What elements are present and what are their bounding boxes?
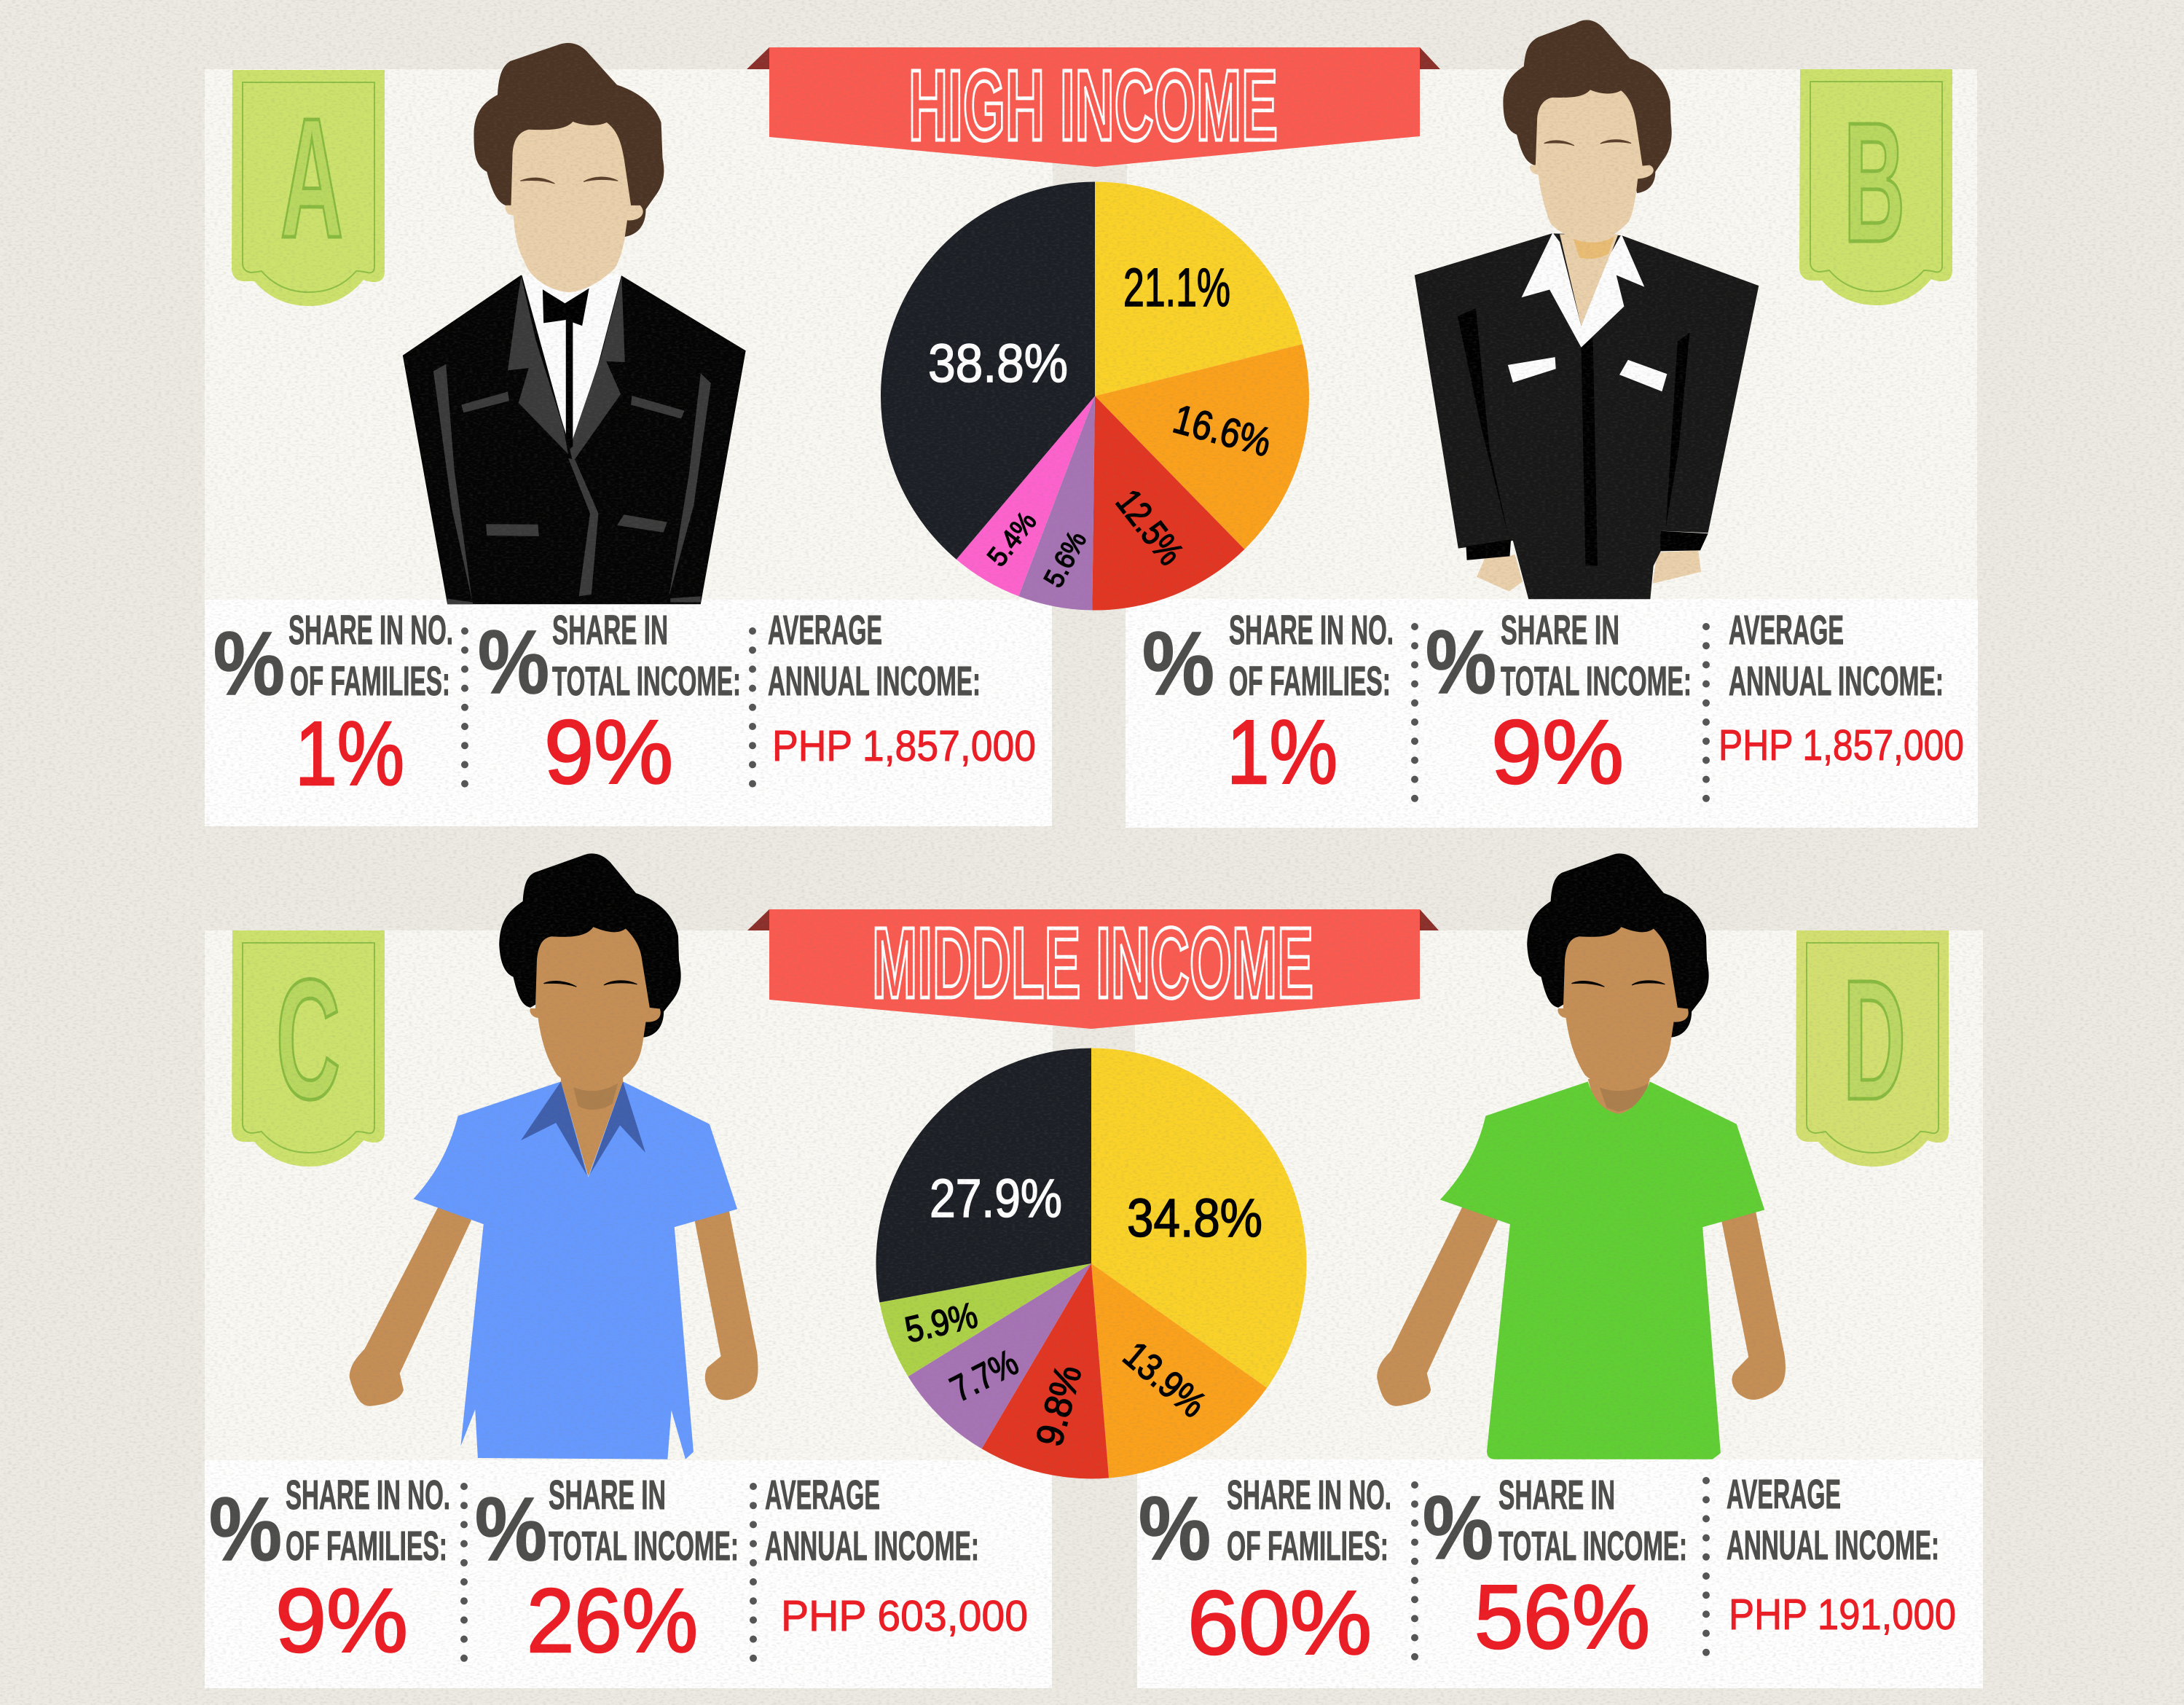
label 38.8%: 38.8% — [928, 333, 1068, 393]
badge C: C — [276, 944, 340, 1134]
average income label: AVERAGE — [1729, 607, 1844, 654]
label 5.9%: 5.9% — [901, 1294, 981, 1351]
stats block A — [213, 607, 1036, 804]
value 60%: 60% — [1187, 1573, 1372, 1674]
value average income: PHP 191,000 — [1729, 1591, 1956, 1639]
value average income: PHP 1,857,000 — [1718, 721, 1964, 769]
figure A: man in tuxedo — [403, 43, 746, 604]
stats block B — [1142, 607, 1964, 803]
average income label: ANNUAL INCOME: — [768, 658, 981, 705]
share in income label: SHARE IN — [1498, 1472, 1615, 1518]
panel: high income right — [1127, 69, 1977, 601]
share in families label: SHARE IN NO. — [1227, 1472, 1391, 1518]
badge A: A — [280, 82, 343, 273]
share in income label: SHARE IN — [552, 607, 668, 654]
share in income label: TOTAL INCOME: — [1498, 1523, 1687, 1569]
figure C: man in blue polo — [350, 853, 758, 1459]
average income label: ANNUAL INCOME: — [1727, 1522, 1939, 1569]
average income label: AVERAGE — [1727, 1471, 1841, 1518]
share in families label: OF FAMILIES: — [1229, 658, 1391, 705]
average income label: AVERAGE — [765, 1472, 880, 1518]
share in families label: SHARE IN NO. — [288, 607, 453, 654]
stats block C — [209, 1472, 1028, 1671]
info panel B background — [1126, 599, 1978, 828]
panel: high income left — [205, 69, 1053, 601]
panel: middle income right — [1135, 930, 1983, 1462]
pie chart: middle income — [876, 1048, 1306, 1478]
share in families label: SHARE IN NO. — [286, 1472, 450, 1518]
figure D: man in green t-shirt — [1377, 853, 1786, 1459]
percent icon: % — [478, 613, 549, 713]
pie chart: high income — [881, 181, 1309, 611]
value 9%: 9% — [544, 702, 673, 803]
info panel D background — [1137, 1459, 1983, 1688]
label 12.5%: 12.5% — [1108, 482, 1191, 573]
average income label: ANNUAL INCOME: — [1729, 658, 1944, 705]
heading: high income: HIGH INCOME — [908, 50, 1278, 162]
panel: middle income left — [205, 930, 1053, 1462]
badge B — [1799, 69, 1952, 305]
stats block D — [1139, 1471, 1956, 1674]
percent icon: % — [1142, 614, 1214, 714]
percent icon: % — [1426, 613, 1496, 713]
label 7.7%: 7.7% — [944, 1341, 1024, 1410]
label 16.6%: 16.6% — [1168, 395, 1276, 466]
value 56%: 56% — [1474, 1567, 1650, 1668]
share in families label: OF FAMILIES: — [290, 658, 450, 705]
percent icon: % — [1139, 1479, 1211, 1579]
value 26%: 26% — [527, 1571, 698, 1671]
share in families label: SHARE IN NO. — [1229, 607, 1394, 654]
value average income: PHP 603,000 — [781, 1592, 1028, 1640]
value average income: PHP 1,857,000 — [772, 722, 1036, 770]
figure D head — [1527, 853, 1709, 1090]
value 9%: 9% — [275, 1571, 408, 1671]
info panel A background — [205, 600, 1052, 826]
percent icon: % — [1423, 1478, 1493, 1578]
label 9.8%: 9.8% — [1028, 1361, 1090, 1451]
label 27.9%: 27.9% — [930, 1168, 1062, 1228]
average income label: AVERAGE — [768, 607, 882, 654]
figure D body — [1377, 1079, 1786, 1459]
label 5.4%: 5.4% — [982, 506, 1042, 572]
heading: middle income: MIDDLE INCOME — [872, 907, 1313, 1019]
average income label: ANNUAL INCOME: — [765, 1523, 979, 1569]
badge A — [232, 70, 385, 306]
figure B: man in black jacket — [1415, 20, 1759, 599]
value 1%: 1% — [1227, 702, 1337, 803]
percent icon: % — [475, 1480, 547, 1580]
value 9%: 9% — [1491, 702, 1624, 803]
label 34.8%: 34.8% — [1127, 1188, 1262, 1248]
label 21.1%: 21.1% — [1123, 257, 1230, 318]
badge B: B — [1844, 87, 1905, 278]
share in income label: TOTAL INCOME: — [552, 658, 741, 705]
percent icon: % — [209, 1480, 282, 1580]
label 5.6%: 5.6% — [1038, 527, 1093, 592]
badge D — [1796, 930, 1949, 1167]
percent icon: % — [213, 614, 285, 714]
badge C — [232, 930, 385, 1167]
share in income label: TOTAL INCOME: — [549, 1523, 739, 1569]
label 13.9%: 13.9% — [1115, 1333, 1214, 1426]
badge D: D — [1843, 944, 1906, 1135]
share in families label: OF FAMILIES: — [286, 1523, 447, 1569]
share in income label: TOTAL INCOME: — [1501, 658, 1692, 705]
share in families label: OF FAMILIES: — [1227, 1523, 1388, 1569]
banner: high income — [747, 47, 1440, 167]
share in income label: SHARE IN — [1501, 607, 1619, 654]
value 1%: 1% — [295, 704, 404, 804]
share in income label: SHARE IN — [549, 1472, 666, 1518]
banner: middle income — [747, 907, 1439, 1029]
info panel C background — [205, 1460, 1052, 1688]
